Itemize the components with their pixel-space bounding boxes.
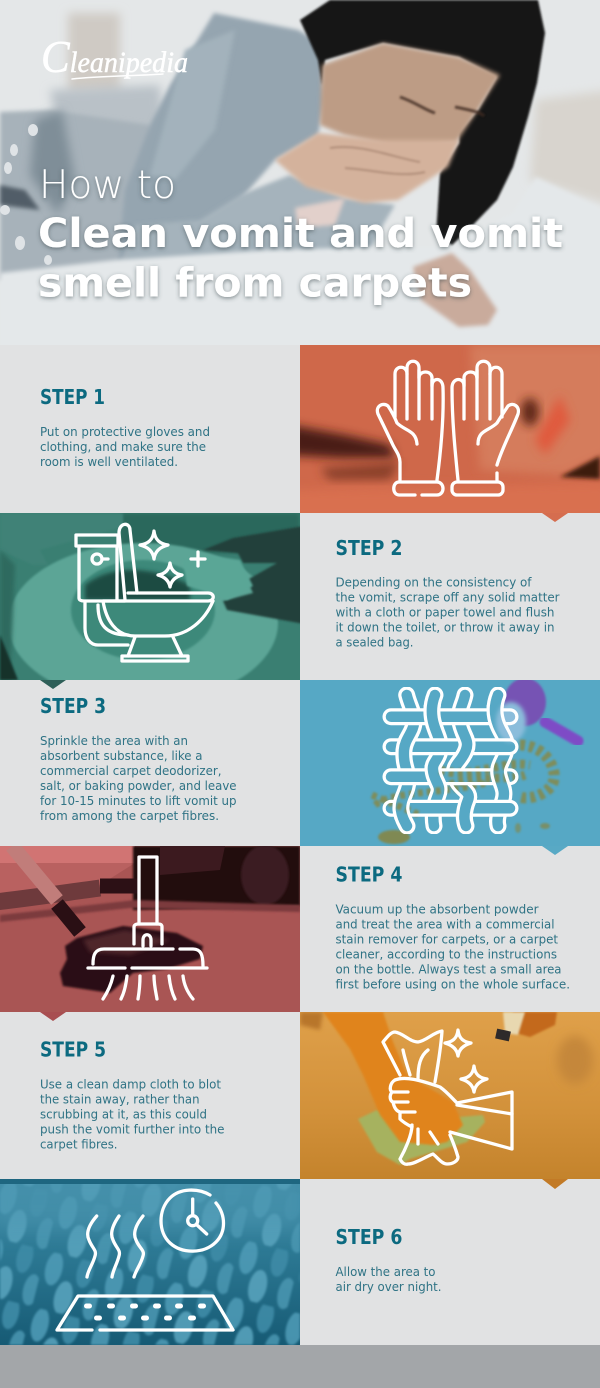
step 3 text: for 10-15 minutes to lift vomit up	[40, 793, 237, 808]
title: smell from carpets	[38, 260, 472, 306]
title	[38, 163, 563, 306]
step 3 text: absorbent substance, like a	[40, 748, 202, 763]
step 6 text	[336, 1179, 568, 1294]
step 5 text: scrubbing at it, as this could	[40, 1106, 207, 1122]
notch: step 1 pointer	[542, 513, 568, 522]
step 3 text: STEP 3	[40, 694, 106, 718]
notch: step 2 pointer	[40, 680, 66, 689]
step 1 text: room is well ventilated.	[40, 454, 178, 469]
notch: step 5 pointer	[542, 1179, 568, 1189]
step 3 text: Sprinkle the area with an	[40, 733, 188, 748]
step 4 text: Vacuum up the absorbent powder	[336, 902, 539, 916]
step 1 image panel	[290, 345, 600, 520]
step 1 text: STEP 1	[40, 385, 105, 409]
icon: vacuum cleaner head	[88, 857, 207, 999]
step 6 image panel	[0, 1170, 310, 1345]
photo: vacuum on carpet, red tint	[0, 845, 300, 1012]
step 6 text: STEP 6	[336, 1225, 402, 1249]
photo: gloved hand wiping carpet, orange tint	[300, 1012, 600, 1179]
photo: paper over toilet, teal tint	[0, 513, 300, 680]
step 4 text	[336, 846, 570, 992]
step 2 text: a sealed bag.	[336, 634, 414, 650]
title: How to	[39, 163, 176, 208]
step 1 text	[40, 385, 210, 469]
step 3 text: salt, or baking powder, and leave	[40, 778, 236, 793]
photo: powder scoop on blue carpet	[300, 678, 600, 846]
step 4 text: on the bottle. Always test a small area	[336, 962, 562, 976]
step 4 text: cleaner, according to the instructions	[336, 946, 557, 962]
step 4 text: first before using on the whole surface.	[336, 976, 570, 992]
step 3 image panel	[300, 678, 600, 846]
step 4 image panel	[0, 845, 300, 1012]
step 5 text	[40, 1012, 224, 1152]
step 3 text: from among the carpet fibres.	[40, 808, 219, 823]
step 2 text: STEP 2	[336, 536, 402, 560]
icon: drying rug, steam and clock	[57, 1190, 233, 1330]
header photo: woman covering mouth in bed	[0, 0, 600, 350]
header	[0, 0, 600, 350]
notch: step 4 pointer	[40, 1012, 66, 1021]
step 5 text: push the vomit further into the	[40, 1122, 224, 1136]
step 5 text: carpet fibres.	[40, 1136, 118, 1152]
step 5 text: the stain away, rather than	[40, 1092, 200, 1106]
title: Clean vomit and vomit	[38, 211, 563, 257]
step 4 text: STEP 4	[336, 862, 402, 886]
step 2 text: Depending on the consistency of	[336, 574, 533, 590]
step 3 text: commercial carpet deodorizer,	[40, 763, 222, 778]
icon: protective gloves	[377, 361, 518, 495]
step 2 image panel	[0, 513, 300, 680]
notch: step 3 pointer	[542, 846, 568, 855]
logo: Cleanipedia: Cleanipedia	[41, 31, 188, 82]
step 3 text	[40, 680, 237, 823]
step 1 text: clothing, and make sure the	[40, 439, 206, 454]
icon detail: rug dots	[84, 1304, 206, 1320]
step 4 text: stain remover for carpets, or a carpet	[336, 932, 559, 946]
photo: gloves on carpet, orange tint	[290, 345, 600, 520]
step 2 text: it down the toilet, or throw it away in	[336, 620, 554, 634]
photo: blue shag carpet	[0, 1170, 310, 1345]
footer bar	[0, 1345, 600, 1388]
step 5 text: Use a clean damp cloth to blot	[40, 1076, 222, 1092]
icon: woven carpet fibres	[380, 687, 521, 834]
step 4 text: and treat the area with a commercial	[336, 916, 554, 932]
step 1 text: Put on protective gloves and	[40, 424, 210, 439]
step 5 image panel	[300, 1012, 600, 1179]
step 2 text: with a cloth or paper towel and flush	[336, 604, 554, 620]
step 5 text: STEP 5	[40, 1038, 106, 1062]
icon: hand holding cloth with sparkles	[383, 1030, 512, 1164]
step 6 text: air dry over night.	[336, 1279, 442, 1294]
step 2 text	[336, 513, 568, 650]
step 2 text: the vomit, scrape off any solid matter	[336, 590, 560, 604]
step 6 text: Allow the area to	[336, 1264, 436, 1279]
icon: toilet with sparkles	[76, 524, 213, 661]
